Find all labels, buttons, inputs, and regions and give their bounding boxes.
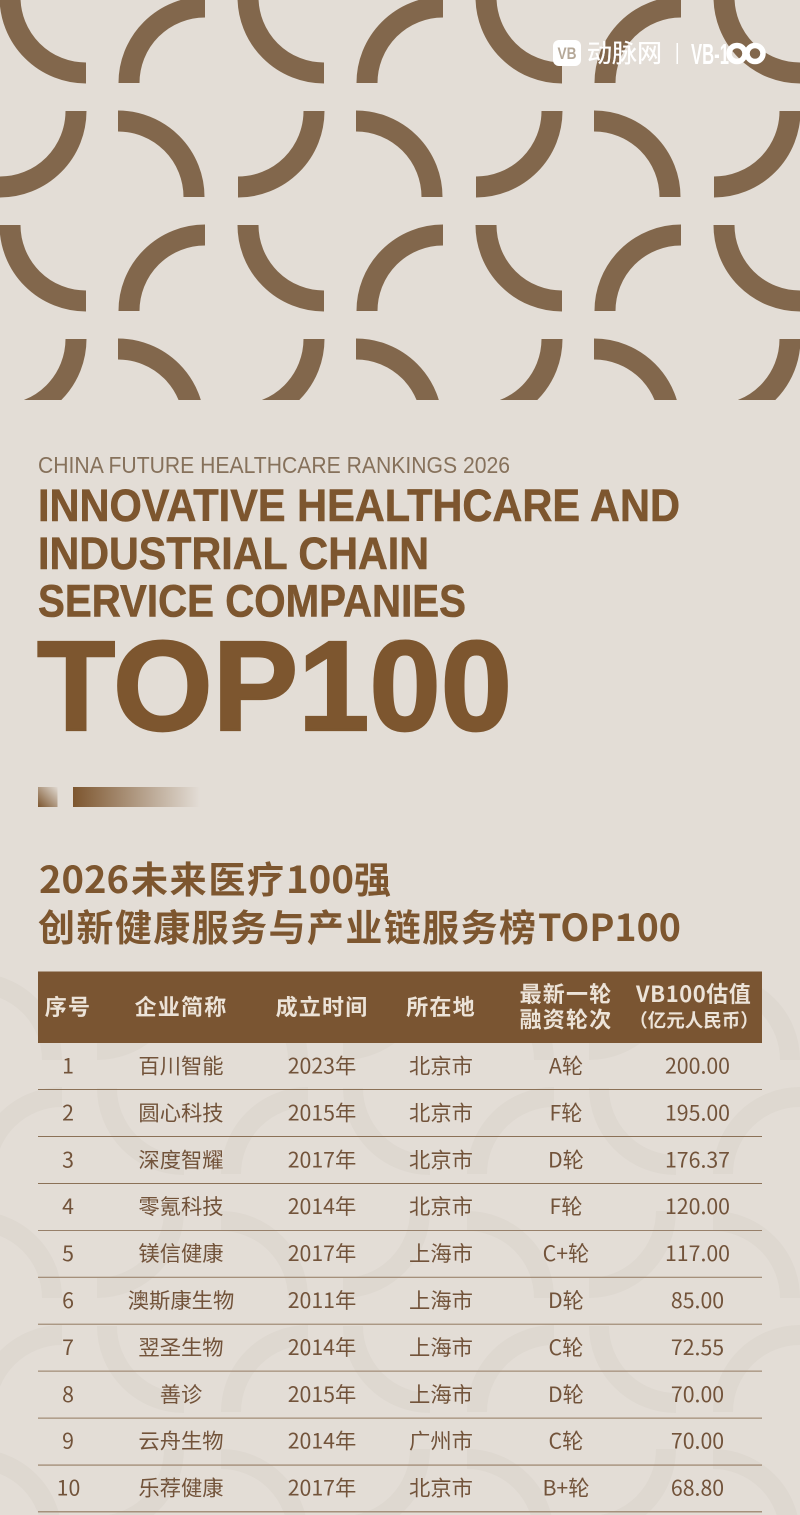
table header: 融资轮次 <box>520 1002 612 1034</box>
Chinese heading <box>38 850 681 952</box>
table row 1: 1 <box>62 1050 74 1080</box>
title: SERVICE COMPANIES <box>38 576 466 626</box>
table row 4: 120.00 <box>665 1190 730 1221</box>
table row 2: F轮 <box>549 1096 583 1127</box>
table row 10: 乐荐健康 <box>138 1472 224 1503</box>
table row 6: 澳斯康生物 <box>128 1284 234 1315</box>
table row 10: 68.80 <box>671 1472 724 1503</box>
table watermark arcs <box>0 973 800 1515</box>
table row 4: 零氪科技 <box>138 1190 224 1221</box>
table row 4: 2014年 <box>288 1190 356 1221</box>
table row 9: 9 <box>62 1425 74 1456</box>
table row 8: 上海市 <box>409 1378 473 1409</box>
logo: VB100 brand: VB-1 <box>691 39 729 71</box>
table row 6: 2011年 <box>288 1284 356 1315</box>
table row 3: D轮 <box>548 1143 584 1174</box>
subtitle: CHINA FUTURE HEALTHCARE RANKINGS 2026 <box>38 452 510 478</box>
table row 3: 2017年 <box>288 1143 356 1174</box>
table row 5: 镁信健康 <box>138 1237 224 1268</box>
table row 6 <box>38 1284 762 1325</box>
table row 9 <box>38 1425 762 1466</box>
table row 2: 2015年 <box>288 1096 356 1127</box>
Chinese heading: 未来医疗 <box>131 850 284 904</box>
table row 8: 善诊 <box>160 1378 202 1409</box>
table row 3: 3 <box>62 1143 74 1174</box>
gradient accent marks <box>38 787 200 807</box>
table row 9: 广州市 <box>409 1425 473 1456</box>
table row 9: 2014年 <box>288 1425 356 1456</box>
table row 1: 200.00 <box>665 1050 730 1080</box>
table header: （亿元人民币） <box>629 1007 759 1033</box>
table row 2: 2 <box>62 1096 74 1127</box>
Chinese heading: 100 <box>286 850 354 904</box>
table row 7 <box>38 1331 762 1372</box>
table row 4: 4 <box>62 1190 74 1221</box>
table row 6: 85.00 <box>671 1284 724 1315</box>
table row 2: 北京市 <box>409 1096 473 1127</box>
Chinese heading: 强 <box>354 850 391 904</box>
table row 9: 云舟生物 <box>138 1425 224 1456</box>
table header: 最新一轮 <box>520 977 612 1009</box>
table row 5: 5 <box>62 1237 74 1268</box>
table row 10: B+轮 <box>542 1472 590 1503</box>
table row 4: F轮 <box>549 1190 583 1221</box>
table row 10 <box>38 1472 762 1512</box>
table row 9: 70.00 <box>671 1425 724 1456</box>
table header: 企业简称 <box>135 990 227 1022</box>
table row 3 <box>38 1143 762 1184</box>
logo: VB100 brand <box>553 34 763 71</box>
table row 3: 深度智耀 <box>138 1143 224 1174</box>
Chinese heading: 创新健康服务与产业链服务榜 <box>38 898 536 952</box>
table row 1: A轮 <box>549 1050 583 1080</box>
table header: VB100估值 <box>635 977 752 1009</box>
table row 8: 2015年 <box>288 1378 356 1409</box>
table row 8 <box>38 1378 762 1419</box>
table row 1: 北京市 <box>409 1050 473 1080</box>
title: INNOVATIVE HEALTHCARE AND <box>38 480 680 531</box>
decorative arc pattern <box>0 0 800 425</box>
table row 6: 6 <box>62 1284 74 1315</box>
table row 5: 117.00 <box>665 1237 730 1268</box>
title <box>38 480 680 626</box>
table row 5: 2017年 <box>288 1237 356 1268</box>
TOP100 headline: TOP100 <box>37 615 512 758</box>
table row 8: 70.00 <box>671 1378 724 1409</box>
table row 5: 上海市 <box>409 1237 473 1268</box>
logo: VB100 brand: VB <box>558 44 576 63</box>
table row 8: 8 <box>62 1378 74 1409</box>
table row 8: D轮 <box>548 1378 584 1409</box>
table row 7: 7 <box>62 1331 74 1362</box>
table header <box>38 972 762 1043</box>
table row 7: C轮 <box>549 1331 583 1362</box>
table row 6: D轮 <box>548 1284 584 1315</box>
table row 1 <box>38 1050 762 1090</box>
table row 10: 北京市 <box>409 1472 473 1503</box>
table row 4 <box>38 1190 762 1231</box>
table row 7: 2014年 <box>288 1331 356 1362</box>
title: INDUSTRIAL CHAIN <box>38 528 429 579</box>
table row 10: 10 <box>57 1472 80 1503</box>
table row 1: 百川智能 <box>138 1050 224 1080</box>
table header: 成立时间 <box>276 990 368 1022</box>
table header: 序号 <box>45 990 91 1022</box>
table row 5 <box>38 1237 762 1278</box>
logo: VB100 brand: 动脉网 <box>587 34 662 70</box>
table row 9: C轮 <box>549 1425 583 1456</box>
table header: 所在地 <box>406 990 476 1022</box>
Chinese heading: 2026 <box>39 850 129 904</box>
table row 3: 北京市 <box>409 1143 473 1174</box>
table row 2 <box>38 1096 762 1137</box>
table row 10: 2017年 <box>288 1472 356 1503</box>
table row 4: 北京市 <box>409 1190 473 1221</box>
table row 7: 翌圣生物 <box>138 1331 224 1362</box>
table row 1: 2023年 <box>288 1050 356 1080</box>
table row 6: 上海市 <box>409 1284 473 1315</box>
table row 5: C+轮 <box>543 1237 589 1268</box>
table row 3: 176.37 <box>665 1143 730 1174</box>
Chinese heading: TOP100 <box>538 898 681 952</box>
table row 2: 195.00 <box>665 1096 730 1127</box>
table row 2: 圆心科技 <box>138 1096 224 1127</box>
table row 7: 上海市 <box>409 1331 473 1362</box>
table row 7: 72.55 <box>671 1331 724 1362</box>
